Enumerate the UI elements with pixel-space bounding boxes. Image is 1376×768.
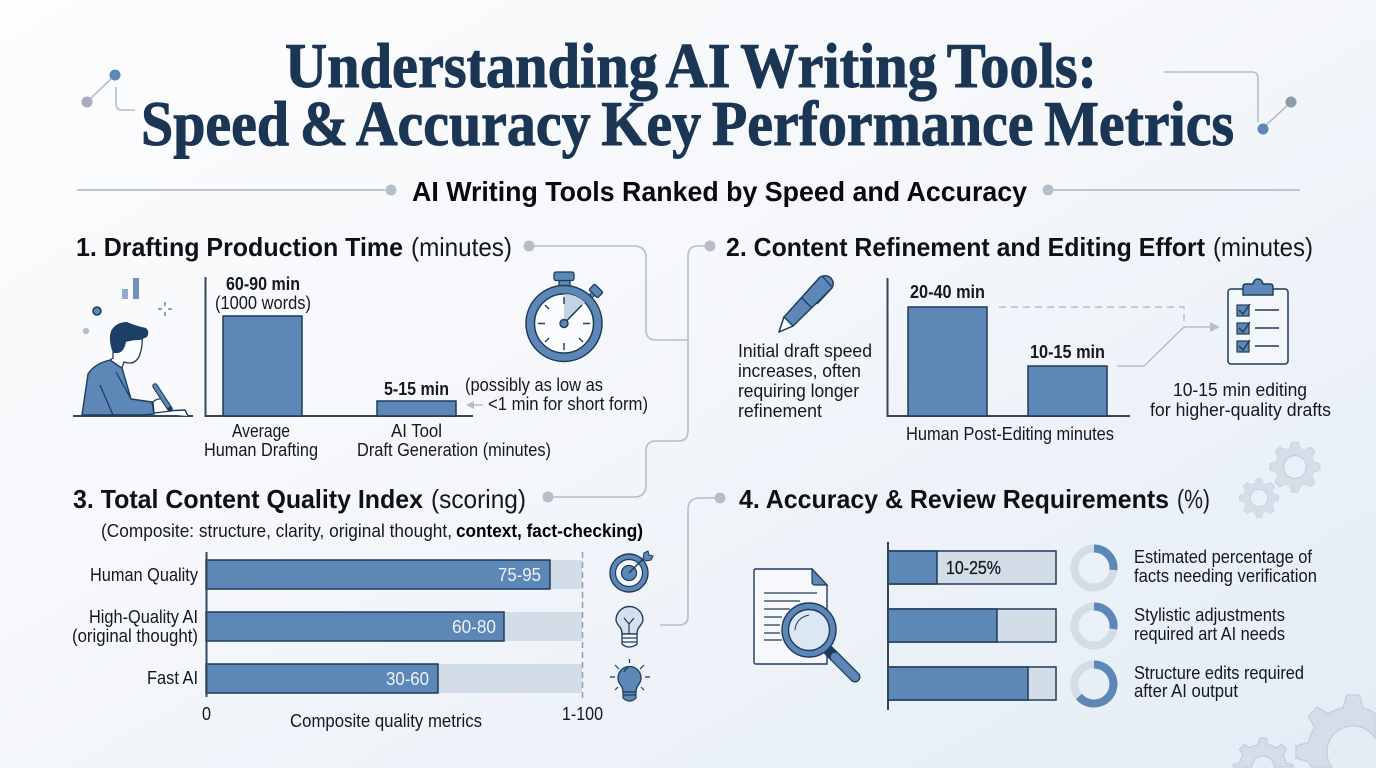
icon: clipboard checklist [1228,279,1288,364]
heading 2: (minutes) [1213,232,1313,262]
text: donut legends [1134,546,1317,701]
icon: document with magnifier [754,569,855,677]
bar chart: editing time [888,278,1130,444]
bar chart: drafting time [204,273,551,460]
bar chart: quality scores: 75-95 [498,564,541,585]
bar chart: quality scores: High-Quality AI [89,606,198,627]
text: editing note: for higher-quality drafts [1150,399,1331,420]
bar chart: editing time: 20-40 min [910,281,985,302]
text: composite description: context, fact-checking) [456,520,643,541]
panel: 4 accuracy and review [739,484,1317,710]
bar chart: drafting time: 5-15 min [384,378,449,399]
bar chart: drafting time: (1000 words) [215,292,311,313]
bar chart: editing time: Human Post-Editing minutes [906,423,1114,444]
heading 4: (%) [1177,484,1210,514]
bar chart: editing time: 10-15 min [1030,341,1105,362]
bar chart: quality scores: Human Quality [90,564,199,585]
text: donut legends: Stylistic adjustments [1134,604,1285,625]
icon: stopwatch [526,272,603,362]
subtitle with rules: AI Writing Tools Ranked by Speed and Accuracy [412,176,1027,207]
text: donut legends: required art AI needs [1134,623,1285,644]
bar chart: quality scores: Composite quality metrics [290,710,482,731]
heading 4: 4. Accuracy & Review Requirements [739,484,1169,514]
decoration: gears [1233,442,1375,767]
connectors between sections [524,240,726,625]
text: draft speed note: refinement [738,400,822,421]
heading 1: 1. Drafting Production Time [76,232,403,262]
text: editing note [1150,379,1331,420]
text: draft speed note: Initial draft speed [738,340,872,361]
donut charts [1074,548,1114,704]
text: donut legends: facts needing verification [1134,565,1317,586]
bar chart: quality scores: 60-80 [452,616,496,637]
bar chart: drafting time: Average [232,420,290,441]
bar chart: quality scores: Fast AI [147,667,198,688]
bar chart: drafting time: 60-90 min [226,273,300,294]
icon: pen [779,276,833,332]
bar chart: quality scores: (original thought) [72,625,198,646]
panel: 1 drafting production time [73,232,648,460]
text: editing note: 10-15 min editing [1173,379,1307,400]
title: Speed & Accuracy Key Performance Metrics [141,89,1234,159]
text: composite description [101,520,643,541]
icon: lit bulb [610,659,650,701]
heading 3: 3. Total Content Quality Index [73,484,424,514]
heading 2: 2. Content Refinement and Editing Effort [726,232,1205,262]
callout: short form note: <1 min for short form) [488,393,648,414]
text: draft speed note [738,340,872,421]
text: composite description: (Composite: structure, clarity, original thought, [101,520,452,541]
title: Understanding AI Writing Tools: [285,31,1097,101]
icon: light bulb outline [616,606,643,647]
text: donut legends: after AI output [1134,680,1238,701]
title [141,31,1234,159]
bar chart: quality scores: 0 [202,703,211,724]
text: draft speed note: increases, often [738,360,861,381]
arrow: dashed link to checklist [999,307,1220,366]
decoration: left title nodes [82,70,135,110]
heading 1: (minutes) [411,232,512,262]
icon: person writing [73,278,193,416]
callout: short form note: (possibly as low as [465,374,603,395]
panel: 2 content refinement [726,232,1331,444]
bar chart: review percentages: 10-25% [946,557,1001,578]
callout: short form note [465,374,648,414]
bar chart: drafting time: Draft Generation (minutes) [357,439,551,460]
icon: target [610,551,653,592]
bar chart: review percentages [888,542,1056,710]
text: donut legends: Structure edits required [1134,662,1304,683]
subtitle with rules [77,176,1300,207]
bar chart: drafting time: AI Tool [391,420,442,441]
heading 3: (scoring) [431,484,526,514]
text: donut legends: Estimated percentage of [1134,546,1313,567]
bar chart: drafting time: Human Drafting [204,439,318,460]
bar chart: quality scores: 1-100 [562,703,603,724]
bar chart: quality scores [72,552,603,731]
text: draft speed note: requiring longer [738,380,859,401]
panel: 3 total content quality index [72,484,653,731]
bar chart: quality scores: 30-60 [386,668,429,689]
decoration: right title nodes [1164,72,1296,134]
